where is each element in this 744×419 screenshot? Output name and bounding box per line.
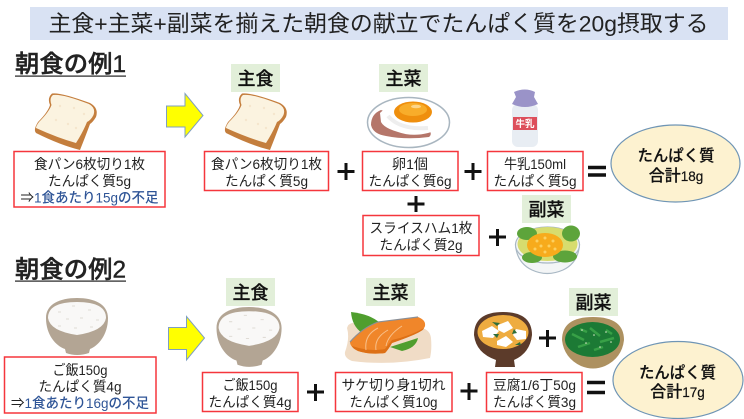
arrow: example 1 [166, 94, 203, 137]
plus [338, 163, 354, 180]
text box: bread: 食パン6枚切り1枚 [211, 156, 322, 172]
label: main dish 2: 主菜 [372, 283, 408, 303]
text box: milk: たんぱく質5g [494, 173, 576, 189]
icon: milk bottle [512, 90, 538, 147]
text box: tofu [486, 372, 582, 412]
text box: rice [202, 372, 298, 412]
total ellipse 1: たんぱく質 [638, 147, 714, 165]
text box: salmon [336, 372, 452, 412]
label: main dish 2 [366, 278, 415, 306]
label: staple 1 [231, 64, 280, 92]
label: side dish 1 [522, 195, 571, 223]
total ellipse 2 [613, 342, 743, 418]
text box: bread shortage: ⇒1食あたり15gの不足 [20, 190, 158, 206]
icon: rice bowl staple [216, 307, 282, 367]
total ellipse 1 [611, 125, 740, 202]
arrow: example 2 [168, 316, 204, 360]
label: side dish 2 [569, 288, 618, 316]
label: staple 1: 主食 [238, 69, 274, 89]
heading: example 1: 朝食の例1 [15, 51, 126, 78]
label: side dish 2: 副菜 [576, 293, 612, 313]
plus [489, 229, 506, 246]
plus [408, 196, 424, 212]
text box: bread [204, 152, 328, 190]
label: main dish 1: 主菜 [386, 69, 422, 89]
icon: salad [516, 226, 580, 274]
icon: bread slice [35, 93, 97, 150]
text box: egg: 卵1個 [392, 156, 428, 172]
icon: miso soup [474, 312, 532, 367]
text box: milk [488, 152, 583, 190]
equals [588, 168, 606, 175]
text box: egg [362, 152, 458, 190]
text box: bread: たんぱく質5g [225, 173, 308, 189]
text box: rice shortage: ⇒1食あたり16gの不足 [11, 395, 149, 411]
label: staple 2: 主食 [232, 283, 268, 303]
text box: egg: たんぱく質6g [368, 173, 452, 189]
label: side dish 1: 副菜 [528, 200, 564, 220]
text box: ham: スライスハム1枚 [370, 220, 472, 236]
label: main dish 1 [379, 64, 428, 92]
plus [539, 330, 556, 347]
text box: rice shortage: ご飯150g [52, 362, 108, 378]
text box: bread shortage [14, 152, 165, 207]
icon: bread slice staple [225, 93, 287, 150]
text box: ham: たんぱく質2g [380, 237, 462, 253]
label: staple 2 [226, 278, 275, 306]
title band: 主食+主菜+副菜を揃えた朝食の献立でたんぱく質を20g摂取する [48, 12, 708, 36]
icon: rice bowl [46, 298, 108, 355]
plus [307, 384, 324, 401]
text box: rice shortage: たんぱく質4g [38, 378, 122, 394]
equals [587, 382, 605, 392]
text box: rice: たんぱく質4g [208, 394, 292, 410]
total ellipse 2: 合計17g [650, 383, 705, 401]
icon: milk bottle: 牛乳 [515, 118, 535, 130]
text box: ham [363, 216, 479, 256]
text box: rice shortage [4, 357, 156, 413]
total ellipse 2: たんぱく質 [639, 364, 716, 382]
icon: grilled salmon [345, 312, 431, 363]
plus [464, 163, 482, 180]
text box: bread shortage: たんぱく質5g [48, 173, 131, 189]
text box: salmon: たんぱく質10g [350, 394, 438, 410]
text box: rice: ご飯150g [222, 377, 278, 393]
text box: salmon: サケ切り身1切れ [342, 377, 446, 393]
icon: fried egg on ham [368, 98, 450, 148]
text box: tofu: たんぱく質3g [493, 394, 576, 410]
text box: milk: 牛乳150ml [504, 156, 566, 172]
total ellipse 1: 合計18g [649, 167, 703, 185]
heading: example 2: 朝食の例2 [15, 256, 126, 284]
text box: tofu: 豆腐1/6丁50g [493, 377, 576, 393]
text box: bread shortage: 食パン6枚切り1枚 [34, 156, 145, 172]
icon: spinach bowl [562, 317, 624, 368]
plus [460, 383, 478, 400]
